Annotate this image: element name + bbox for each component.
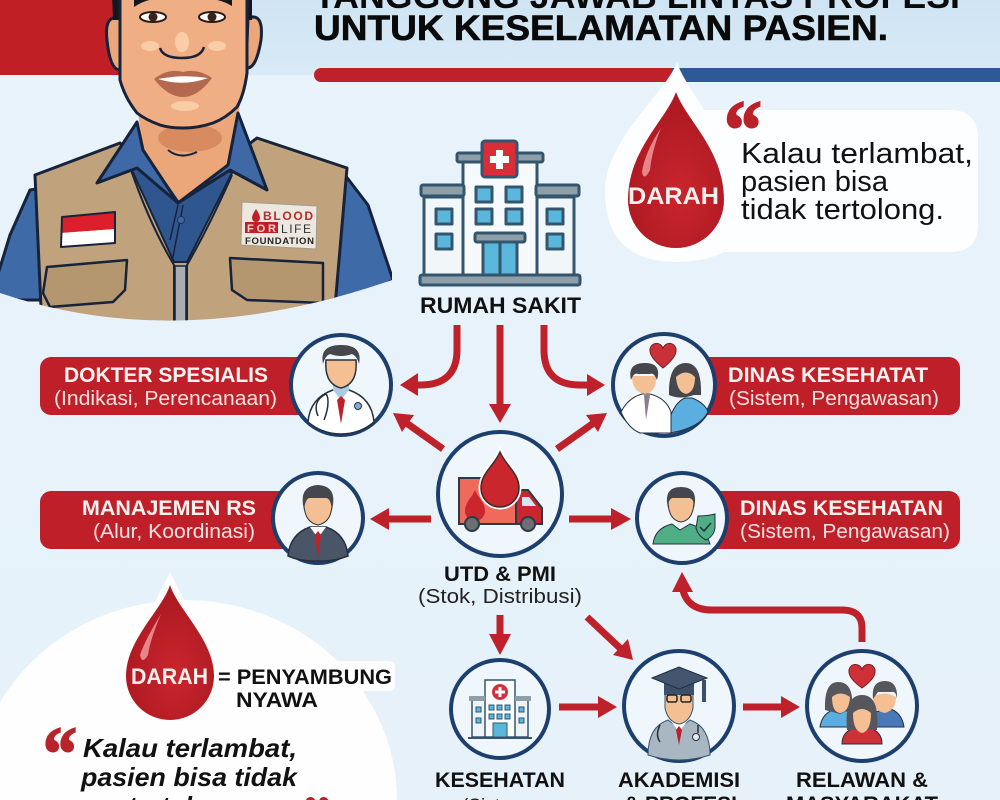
pill: dinas kesehatat — [690, 357, 960, 415]
divider bar red and blue — [314, 68, 1000, 82]
shirt — [132, 170, 233, 263]
icon: volunteers — [807, 651, 917, 761]
hair — [112, 0, 252, 20]
pill: manajemen rs — [40, 491, 300, 549]
eyes — [140, 12, 166, 22]
label: utd & pmi — [418, 563, 582, 608]
panel: darah penyambung nyawa: NYAWA — [236, 689, 318, 712]
label: akademisi & profesi: AKADEMISI — [618, 769, 740, 792]
icon: blood delivery truck — [438, 432, 562, 556]
pill: dokter spesialis: (Indikasi, Perencanaan) — [54, 388, 277, 410]
pill: manajemen rs: (Alur, Koordinasi) — [93, 521, 255, 543]
panel: darah penyambung nyawa: “ — [43, 712, 77, 796]
icon: academic — [624, 651, 734, 761]
panel: darah penyambung nyawa: = PENYAMBUNG — [218, 666, 392, 689]
title — [314, 0, 960, 48]
pockets — [43, 260, 127, 307]
arrowheads — [370, 373, 800, 718]
icon: medical team — [613, 334, 715, 436]
icon: kesehatan building — [451, 660, 549, 758]
logo patch — [241, 202, 317, 249]
label: relawan & masyarakat: RELAWAN & — [796, 769, 928, 792]
header red block — [0, 0, 125, 75]
hospital label: RUMAH SAKIT — [420, 293, 582, 318]
pill: dinas kesehatan — [700, 491, 960, 549]
panel: darah penyambung nyawa: DARAH — [131, 664, 208, 689]
callout: darah quote: DARAH — [628, 183, 719, 210]
portrait illustration: BLOOD — [263, 209, 313, 223]
portrait illustration: LIFE — [281, 222, 311, 236]
label: kesehatan: KESEHATAN — [435, 769, 565, 792]
label: relawan & masyarakat — [786, 769, 938, 800]
callout: darah quote — [605, 62, 978, 262]
callout: darah quote: “ — [724, 84, 762, 177]
nose and cheeks — [175, 32, 189, 52]
mouth — [154, 71, 212, 97]
icon: health worker with shield — [637, 473, 727, 563]
panel: darah penyambung nyawa: pasien bisa tidak — [80, 762, 299, 792]
callout: darah quote: tidak tertolong. — [741, 194, 944, 226]
vest seams — [131, 170, 232, 325]
pill: manajemen rs: MANAJEMEN RS — [82, 497, 256, 520]
pill: dokter spesialis — [40, 357, 320, 415]
arrows between nodes — [382, 325, 862, 707]
callout: darah quote: pasien bisa — [741, 166, 889, 198]
ears — [107, 17, 120, 70]
pill: dinas kesehatat: DINAS KESEHATAT — [728, 364, 928, 387]
portrait illustration: FOR — [247, 223, 276, 235]
pill: dinas kesehatat: (Sistem, Pengawasan) — [729, 388, 939, 410]
pill: dokter spesialis: DOKTER SPESIALIS — [64, 364, 268, 387]
pill: dinas kesehatan: (Sistem, Pengawasan) — [740, 521, 950, 543]
icon: doctor — [291, 335, 391, 435]
flag patch — [61, 212, 115, 233]
collars — [97, 122, 178, 203]
panel: darah penyambung nyawa: Kalau terlambat, — [83, 733, 297, 763]
title: UNTUK KESELAMATAN PASIEN. — [314, 9, 888, 48]
neck — [137, 105, 240, 202]
callout: darah quote: Kalau terlambat, — [741, 138, 973, 170]
label: utd & pmi: UTD & PMI — [444, 563, 556, 586]
panel: darah penyambung nyawa — [0, 572, 397, 800]
face — [120, 0, 247, 128]
label: utd & pmi: (Stok, Distribusi) — [418, 586, 582, 608]
icon: manager — [273, 473, 363, 563]
sleeves — [0, 188, 40, 302]
pill: dinas kesehatan: DINAS KESEHATAN — [740, 497, 943, 520]
brows — [134, 0, 150, 7]
vest — [35, 138, 347, 330]
portrait illustration — [0, 0, 393, 330]
portrait illustration: FOUNDATION — [245, 236, 314, 247]
hospital icon — [420, 141, 580, 285]
